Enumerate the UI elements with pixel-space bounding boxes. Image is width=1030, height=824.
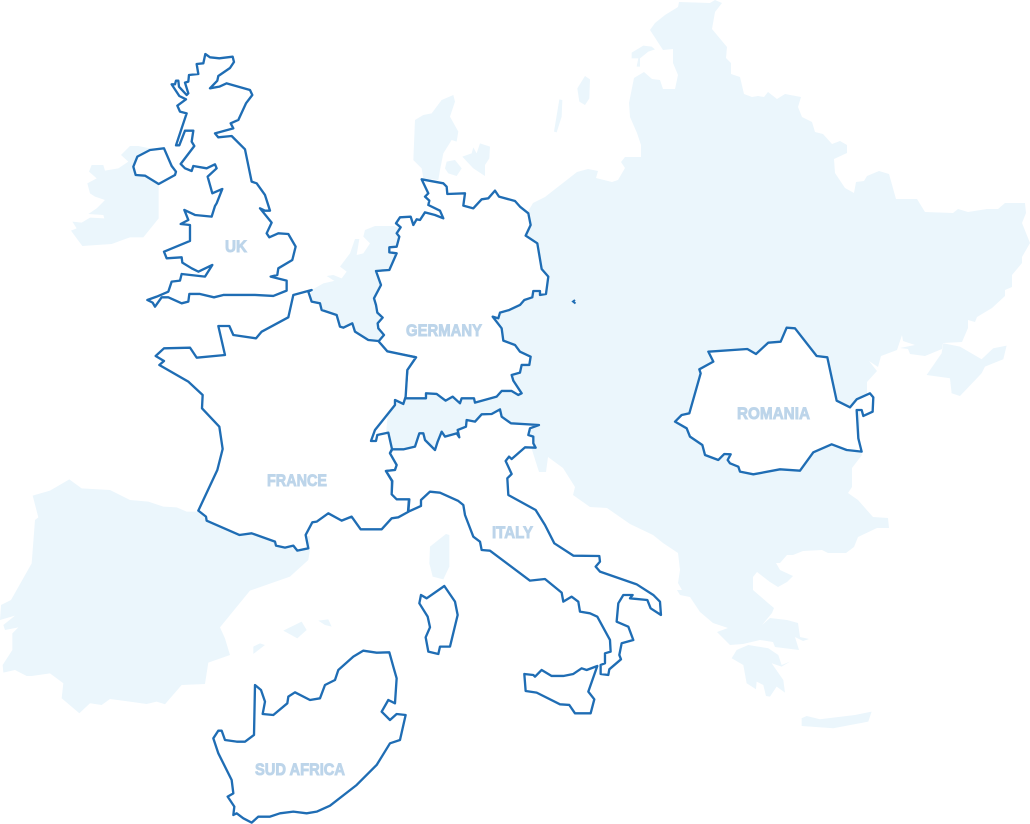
Germany outline [374,179,548,403]
background land: Ireland [71,146,159,246]
background land: Spain and Portugal [0,479,310,713]
country: Romania [675,328,873,474]
France label: FRANCE [267,471,327,490]
Italy label: ITALY [492,523,534,542]
Romania outline [675,328,873,474]
background land: Corsica [429,534,449,579]
background land: Denmark [413,95,490,180]
country: South Africa [213,651,406,823]
background land: eastern Europe [385,0,1030,650]
UK: Great Britain outline [147,54,296,307]
country: UK [133,54,296,307]
Romania label: ROMANIA [737,404,810,423]
background land: Baltic islands [554,46,655,132]
background land: Peloponnese [732,645,790,697]
Sicily outline [524,666,597,713]
country: Germany [374,179,548,403]
background land: Crimea [927,343,1007,396]
country: France [156,290,416,551]
Sardinia outline [419,586,458,654]
Italy mainland outline [386,409,661,675]
background land: Benelux [310,226,407,343]
background land: Balearic islands [253,619,332,654]
background land: Crete [802,712,872,728]
country: Italy [386,409,661,713]
South Africa outline [213,651,406,823]
South Africa label: SUD AFRICA [255,760,345,779]
UK: Northern Ireland outline [133,148,176,184]
Germany label: GERMANY [406,321,483,340]
France outline [156,290,416,551]
UK label: UK [225,237,248,256]
small location mark [573,300,576,304]
